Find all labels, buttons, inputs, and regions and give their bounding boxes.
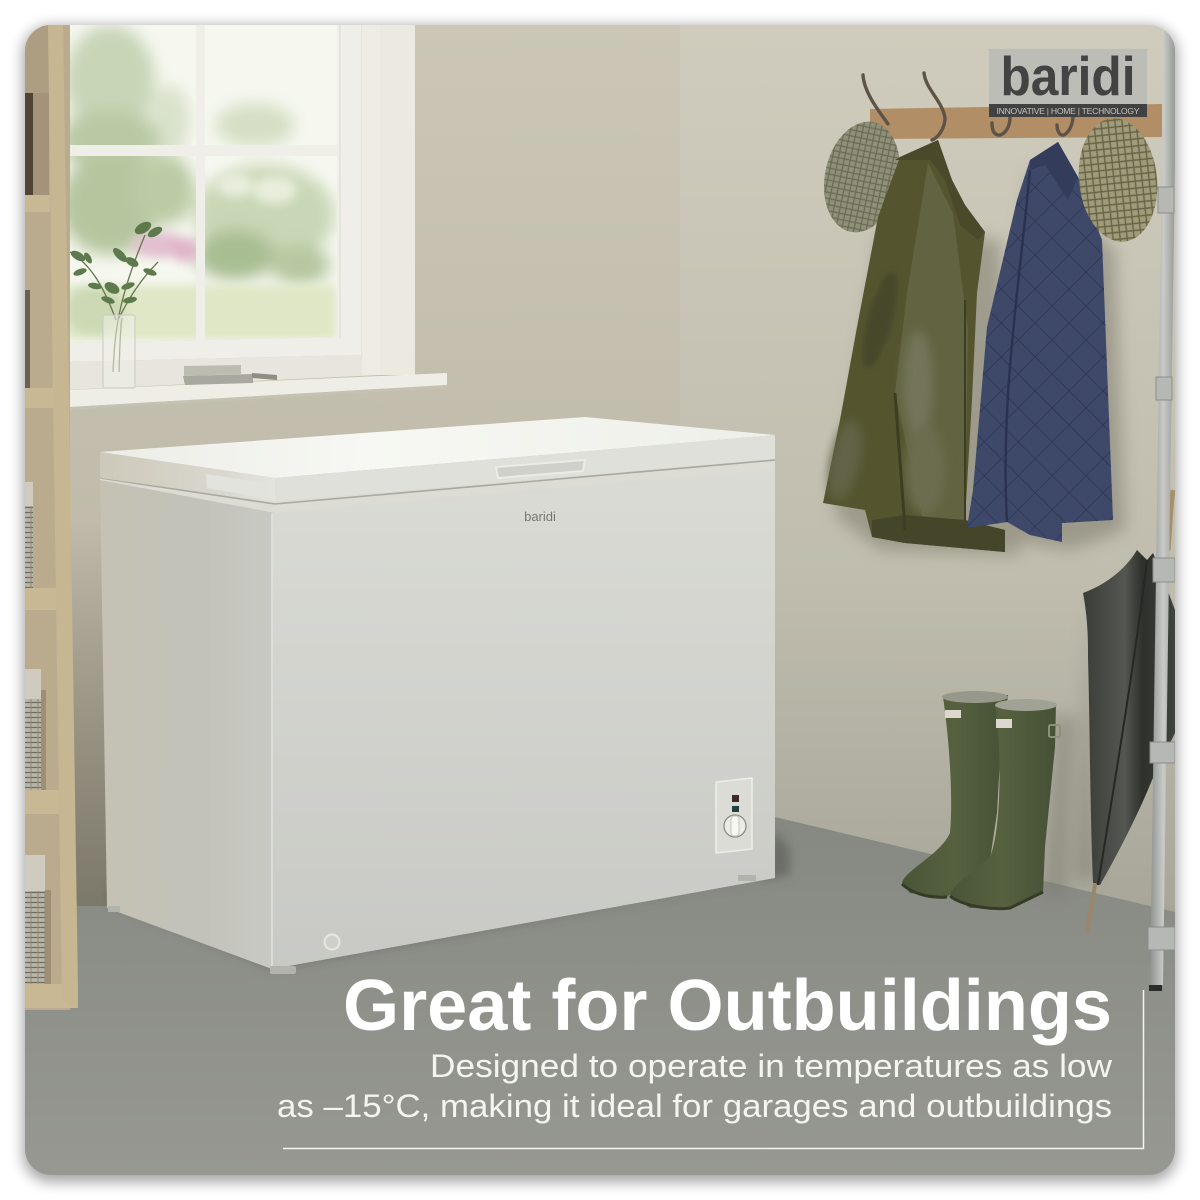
navy quilted jacket — [967, 142, 1113, 542]
wire shelving rack — [1148, 25, 1177, 991]
books on sill — [183, 365, 277, 385]
left wall — [70, 25, 680, 756]
front lid handle — [496, 460, 585, 478]
green jacket — [823, 140, 1005, 552]
boot and umbrella wall shadows — [1045, 600, 1095, 895]
left flat cap — [824, 122, 900, 232]
coat rack board — [870, 104, 1162, 139]
description line 1: Designed to operate in temperatures as low — [430, 1048, 1113, 1084]
freezer feet — [108, 875, 756, 974]
drain plug — [324, 934, 340, 950]
inner window trim — [65, 355, 380, 390]
plant in glass vase — [69, 219, 164, 388]
logo wordmark: baridi — [1000, 45, 1136, 107]
basket middle — [25, 669, 46, 790]
garden view — [60, 25, 337, 345]
window reveal — [380, 25, 415, 375]
freezer lid side — [100, 452, 275, 502]
side lid handle — [206, 474, 244, 494]
right wellington boot — [950, 699, 1060, 909]
logo background — [989, 49, 1147, 104]
coat hooks — [863, 73, 1073, 140]
freezer side panel — [100, 480, 275, 969]
control panel — [716, 778, 752, 853]
umbrella — [1083, 490, 1175, 930]
brand logo — [989, 45, 1147, 117]
window — [60, 25, 447, 410]
chest freezer — [100, 417, 775, 974]
left shelf unit — [25, 25, 78, 1010]
freezer gasket band — [100, 459, 775, 513]
corner rule — [283, 990, 1144, 1148]
jacket light panel — [895, 163, 968, 520]
brand label on freezer: baridi — [524, 509, 556, 524]
shelf boards — [25, 195, 78, 1008]
freezer lid top — [100, 417, 775, 478]
window frame — [65, 25, 362, 362]
window sill — [69, 373, 447, 410]
freezer shadow — [227, 832, 793, 970]
wall shadow behind freezer — [72, 574, 107, 906]
shelf upright — [48, 25, 78, 1008]
basket lower — [25, 855, 51, 986]
headline: Great for Outbuildings — [343, 966, 1112, 1046]
logo tagline bar — [989, 104, 1147, 117]
description line 2: as –15°C, making it ideal for garages and outbuildings — [277, 1088, 1112, 1124]
basket upper — [25, 482, 33, 588]
coat shadows — [835, 170, 1125, 555]
right flat cap — [1073, 114, 1163, 246]
logo tagline: INNOVATIVE | HOME | TECHNOLOGY — [996, 106, 1140, 116]
floor — [25, 817, 1175, 1175]
right wall — [680, 25, 1175, 945]
shelf interior — [25, 25, 70, 1010]
left wellington boot — [902, 691, 1008, 897]
freezer lid front — [275, 435, 775, 502]
jacket collar — [895, 140, 985, 240]
freezer front panel — [272, 468, 775, 969]
